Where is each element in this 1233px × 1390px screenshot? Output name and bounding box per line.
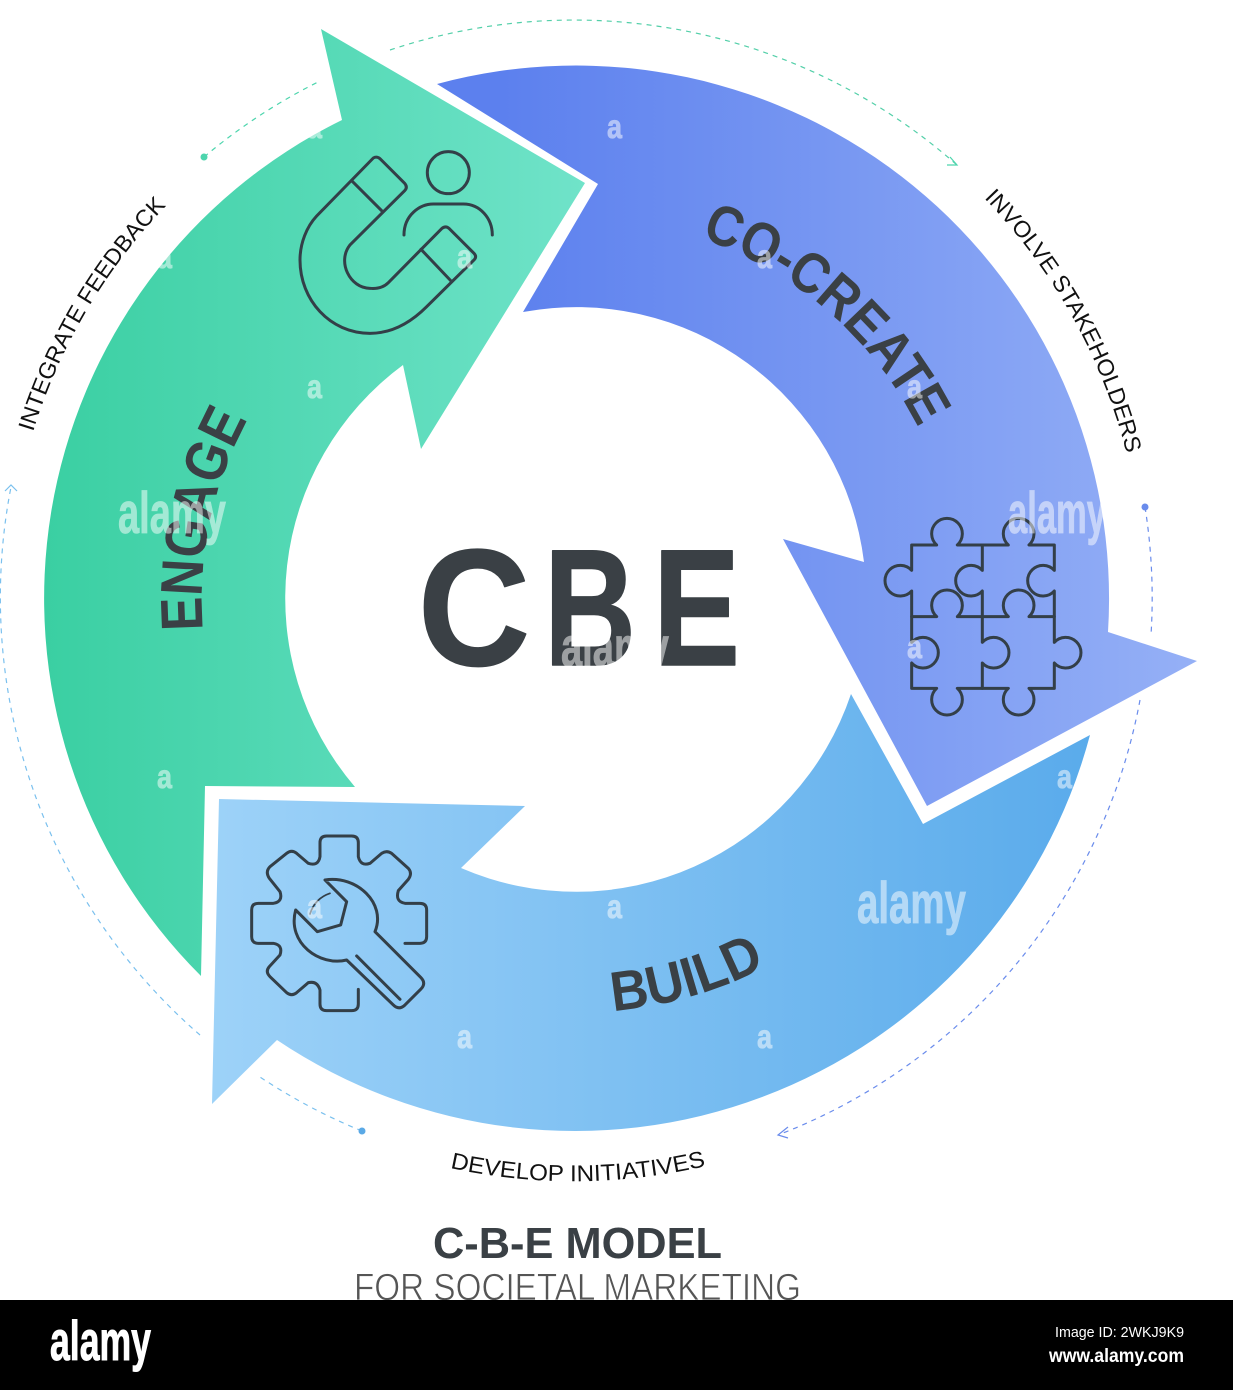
- watermarks: a: [307, 108, 323, 145]
- watermarks: alamy: [1008, 481, 1106, 546]
- outer label: develop initiatives: DEVELOP INITIATIVES: [452, 1152, 704, 1182]
- watermarks: a: [757, 238, 773, 275]
- watermarks: a: [907, 628, 923, 665]
- dashed arc: left: [0, 485, 366, 1134]
- footer bar: [0, 1300, 1233, 1390]
- arrow segment: engage (green): [44, 29, 585, 976]
- center title: CBE: E: [653, 516, 740, 701]
- center title: CBE: [418, 516, 740, 701]
- website: www.alamy.com: [1048, 1346, 1184, 1367]
- watermarks: a: [157, 238, 173, 275]
- footer logo: alamy: [50, 1309, 151, 1372]
- watermarks: a: [157, 758, 173, 795]
- outer label: integrate feedback: INTEGRATE FEEDBACK: [18, 196, 166, 430]
- watermarks: a: [1057, 758, 1073, 795]
- watermarks: a: [307, 368, 323, 405]
- arrow segment: co-create (blue): [437, 66, 1197, 806]
- icon: gear and wrench: [252, 836, 427, 1011]
- arrow segment: build (light blue): [212, 694, 1090, 1131]
- watermarks: a: [757, 1018, 773, 1055]
- watermarks: [118, 108, 1106, 1055]
- outer label: involve stakeholders: INVOLVE STAKEHOLDERS: [986, 188, 1141, 452]
- dashed arc: top: [200, 20, 957, 165]
- label: BUILD: BUILD: [611, 938, 758, 1011]
- watermarks: a: [607, 108, 623, 145]
- center title: CBE: B: [544, 516, 636, 701]
- watermarks: a: [457, 238, 473, 275]
- label: ENGAGE: ENGAGE: [160, 404, 246, 628]
- dashed arc: right: [778, 504, 1152, 1138]
- watermarks: alamy: [561, 615, 669, 678]
- watermarks: alamy: [857, 871, 966, 936]
- watermarks: a: [307, 888, 323, 925]
- heading: C-B-E model: C-B-E MODEL: [433, 1219, 722, 1268]
- subheading: for societal marketing: FOR SOCIETAL MARKETING: [354, 1267, 801, 1309]
- label: CO-CREATE: CO-CREATE: [708, 206, 952, 426]
- icon: puzzle pieces: [885, 518, 1081, 715]
- center title: CBE: C: [418, 516, 530, 701]
- watermarks: a: [457, 1018, 473, 1055]
- watermarks: a: [907, 368, 923, 405]
- image id: Image ID: 2WKJ9K9: [1055, 1324, 1184, 1341]
- watermarks: alamy: [118, 481, 226, 546]
- icon: magnet attracting person: [300, 152, 492, 333]
- watermarks: a: [607, 888, 623, 925]
